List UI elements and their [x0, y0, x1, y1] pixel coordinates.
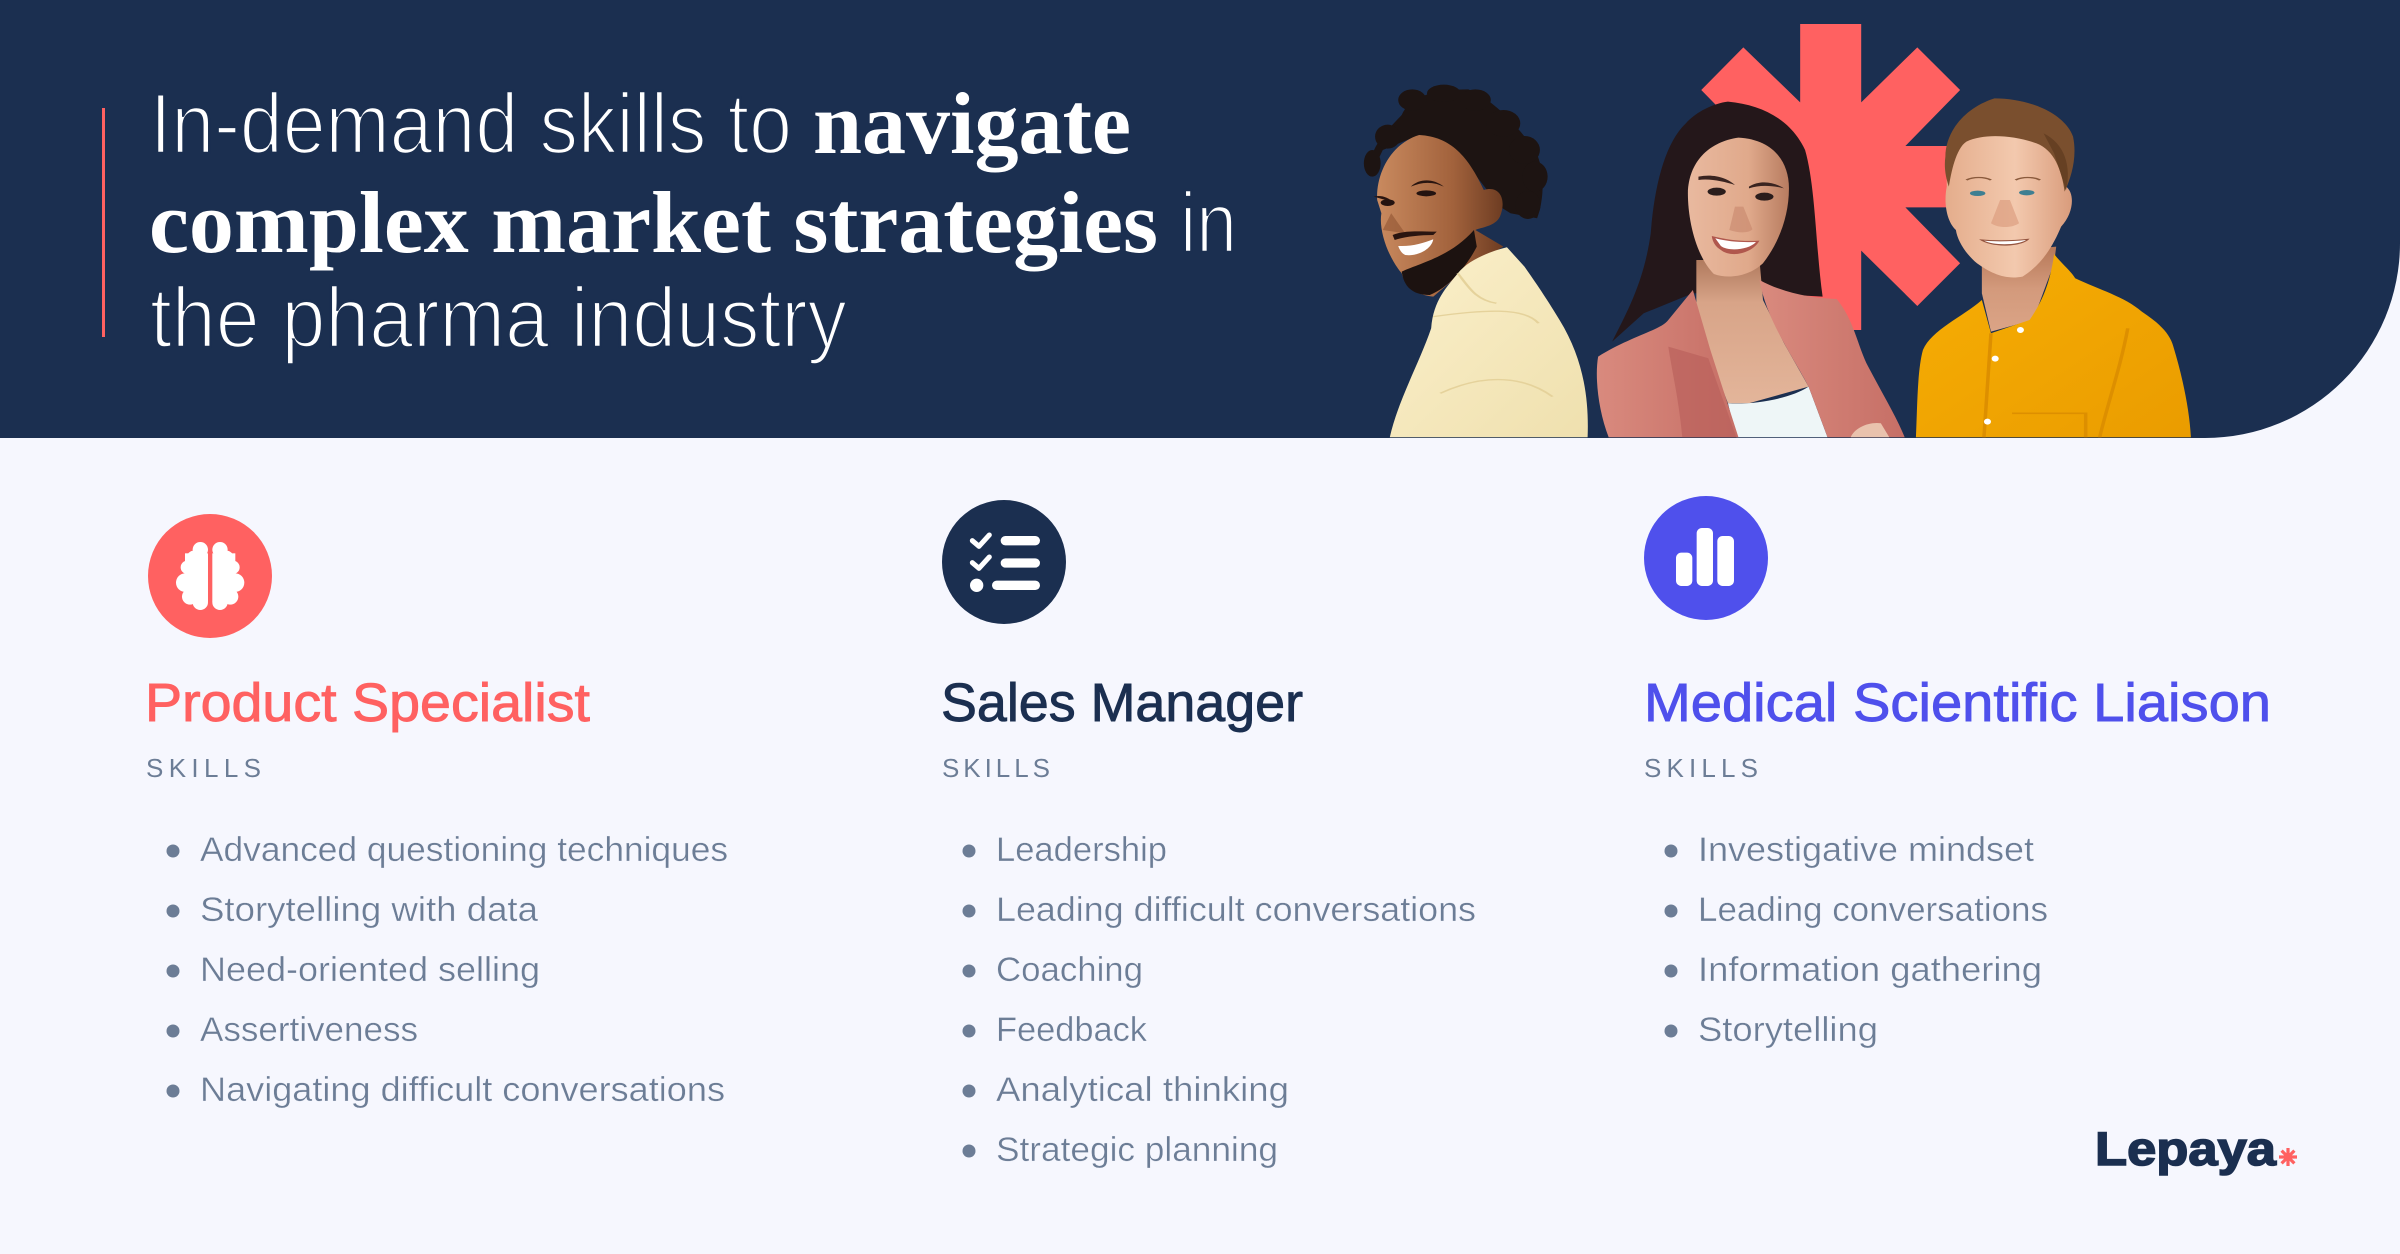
skills list: Strategic planning — [996, 1131, 1278, 1169]
subheading: SKILLS — [942, 753, 1050, 783]
skills list — [166, 831, 728, 1109]
skills list: Storytelling with data — [200, 891, 538, 929]
logo: Lepaya: Lepaya — [2095, 1122, 2277, 1175]
person: man in yellow shirt — [1916, 98, 2191, 437]
skills list: Assertiveness — [200, 1011, 418, 1049]
column: Medical Scientific Liaison — [1644, 496, 2271, 1049]
subheading: SKILLS — [1644, 753, 1758, 783]
heading: Medical Scientific Liaison — [1644, 673, 2271, 733]
header panel — [0, 0, 2400, 438]
subheading: SKILLS — [146, 753, 261, 783]
skills list — [962, 831, 1476, 1169]
icon: bar chart — [1644, 496, 1768, 620]
skills list — [1664, 831, 2048, 1049]
title — [149, 76, 1237, 366]
title: navigate — [813, 76, 1131, 173]
skills list: Leading difficult conversations — [996, 891, 1476, 929]
skills list: Analytical thinking — [996, 1071, 1289, 1109]
skills list: Advanced questioning techniques — [200, 831, 728, 869]
skills list: Leadership — [996, 831, 1167, 869]
title: complex market strategies — [149, 175, 1158, 272]
skills list: Leading conversations — [1698, 891, 2048, 929]
skills list: Navigating difficult conversations — [200, 1071, 725, 1109]
skills list: Investigative mindset — [1698, 831, 2035, 869]
icon: checklist — [942, 500, 1066, 624]
title: the pharma industry — [150, 271, 847, 366]
title: In-demand skills to — [150, 77, 792, 172]
skills list: Feedback — [996, 1011, 1148, 1049]
skills list: Storytelling — [1698, 1011, 1878, 1049]
title: in — [1180, 176, 1237, 271]
skills list: Need-oriented selling — [200, 951, 540, 989]
column: Product Specialist — [145, 514, 728, 1109]
heading: Product Specialist — [145, 673, 590, 733]
column: Sales Manager — [941, 500, 1476, 1169]
skills list: Information gathering — [1698, 951, 2042, 989]
accent bar — [102, 108, 105, 337]
logo asterisk — [2279, 1148, 2297, 1166]
asterisk shape — [1701, 24, 2002, 330]
person: woman in pink blazer — [1597, 102, 1905, 437]
heading: Sales Manager — [941, 673, 1303, 733]
person: man in cream sweater — [1364, 85, 1588, 437]
people and asterisk illustration — [1364, 24, 2191, 437]
skills list: Coaching — [996, 951, 1143, 989]
icon: brain — [148, 514, 272, 638]
